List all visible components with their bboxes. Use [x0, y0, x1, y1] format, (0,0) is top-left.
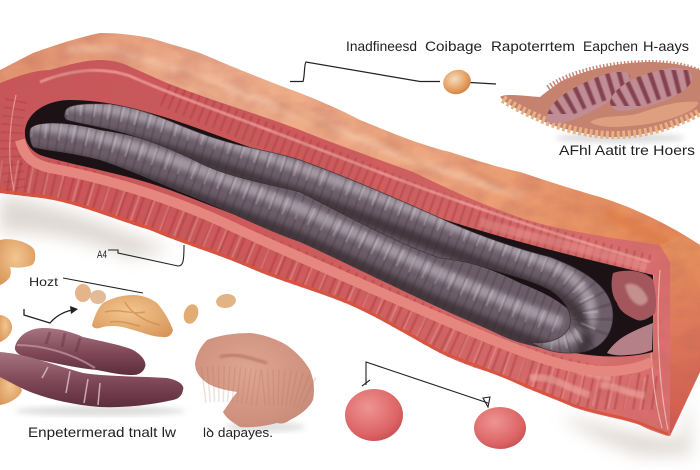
interior small lobe — [607, 323, 653, 355]
title label: Eapchen — [583, 38, 638, 54]
icon: tan blob top left — [0, 239, 35, 285]
icon: tan blob centre — [92, 295, 173, 337]
upper wall pink lobes — [480, 222, 648, 268]
label: bottom centre caption: lꝺ dapayes. — [203, 425, 273, 440]
top band sheen — [66, 44, 668, 244]
upper tube — [62, 104, 613, 365]
icon: red ball right — [474, 407, 526, 449]
leader line from Hozt — [63, 278, 143, 293]
title label: Coibage — [425, 38, 482, 54]
lump shadow — [225, 422, 305, 432]
shadow under intestine — [0, 195, 690, 455]
dark cavity — [25, 100, 653, 356]
label: right caption: AFhl Aatit tre Hoers — [559, 142, 695, 158]
leader line from label A4 — [108, 245, 184, 266]
arrow pointing at blob — [24, 306, 78, 323]
left lobe — [546, 72, 630, 124]
leader line to ball — [362, 362, 490, 407]
interior lump — [612, 271, 656, 321]
icon: seed — [440, 66, 474, 98]
red cut rim — [0, 60, 670, 436]
icon: bean 2 — [90, 290, 106, 304]
icon: upper worm — [15, 328, 145, 375]
worm shadow — [15, 406, 185, 416]
upper wall pale fold — [40, 70, 650, 262]
title label — [346, 38, 689, 54]
icon: red ball left — [345, 389, 403, 441]
worm segment lines — [42, 367, 100, 405]
label: Hozt: Hozt — [29, 275, 59, 289]
upper wall folds — [165, 94, 650, 268]
wall folds and membranes — [0, 70, 668, 434]
lower tube — [27, 123, 590, 352]
icon: villi segment — [500, 62, 700, 143]
label: bottom left caption: Enpetermerad tnalt lw — [28, 424, 177, 440]
lower wall ledge — [20, 140, 652, 371]
icon: bean 1 — [75, 284, 91, 302]
top fringe — [548, 63, 700, 88]
right end face — [660, 235, 700, 436]
leader line to seed — [290, 62, 496, 84]
villi body — [500, 62, 700, 137]
left wall texture — [12, 100, 16, 190]
icon: lower worm — [0, 352, 183, 407]
title label: Inadfineesd — [346, 38, 417, 54]
pink right end lumps — [530, 370, 645, 395]
title label: Rapoterrtem — [491, 38, 575, 54]
icon: bean 3 — [181, 302, 201, 326]
icon: tan blob bottom left — [0, 373, 22, 405]
icon: textured tissue lump — [195, 333, 314, 427]
title label: H-aays — [643, 38, 689, 54]
rim lines — [650, 270, 668, 430]
bottom fringe — [503, 99, 700, 135]
bottom rim edge — [0, 191, 668, 434]
lower wall folds — [0, 172, 655, 398]
label: A4: A4 — [97, 249, 107, 261]
creature shadow — [555, 133, 685, 143]
icon: tan blob mid left — [0, 315, 12, 342]
right lobe — [610, 68, 692, 111]
interior lump highlight — [625, 283, 648, 305]
tan folds — [590, 102, 698, 127]
icon: bean 4 — [215, 293, 237, 309]
